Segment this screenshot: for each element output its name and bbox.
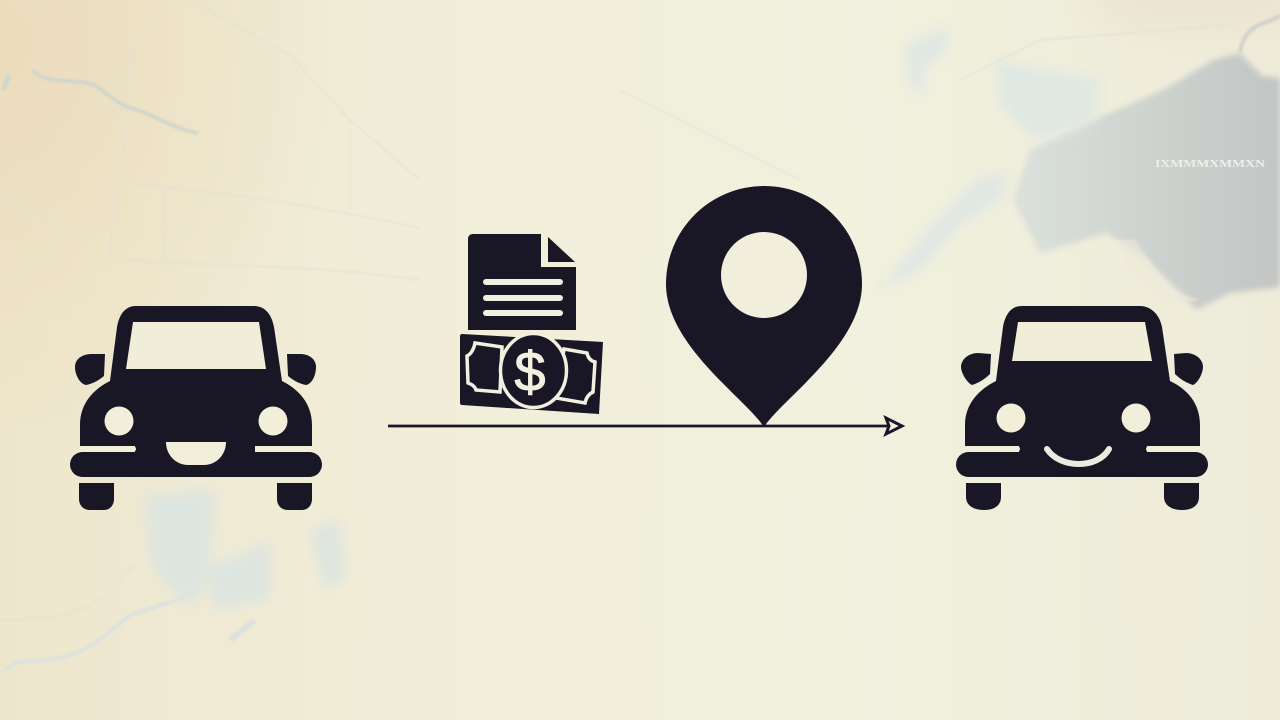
mirror right: [287, 354, 316, 385]
icon: car with open smile (left): [70, 306, 322, 510]
bumper gap left: [963, 446, 1020, 452]
windshield: [126, 322, 266, 369]
mirror right: [1174, 353, 1203, 385]
map label: IXMMMXMMXN: [1155, 158, 1265, 170]
icon: document with bill: [460, 234, 603, 414]
car body: [80, 306, 312, 446]
coin: [500, 334, 566, 408]
smile: [1047, 449, 1109, 464]
icon: location pin: [666, 186, 862, 427]
bumper gap right: [255, 446, 315, 452]
mirror left: [75, 354, 105, 385]
document fold: [548, 237, 575, 262]
mirror left: [961, 353, 991, 385]
banknote left frame: [467, 343, 502, 392]
document lines: [483, 279, 563, 316]
wheel left: [966, 483, 1001, 510]
bumper: [70, 452, 322, 477]
wheel left: [79, 483, 114, 510]
bumper gap left: [78, 446, 136, 452]
document: [468, 234, 576, 330]
map: lake and waterways: [870, 15, 1280, 310]
car body: [965, 306, 1200, 446]
bumper gap right: [1146, 446, 1203, 452]
icon: car with smile (right): [956, 306, 1208, 510]
bumper: [956, 452, 1208, 477]
arrow: [388, 418, 902, 434]
windshield: [1012, 322, 1152, 361]
wheel right: [277, 483, 312, 510]
headlight left: [996, 404, 1026, 432]
banknote right frame: [556, 349, 595, 403]
banknote: [460, 334, 603, 414]
open smile: [166, 442, 226, 465]
headlight right: [258, 406, 288, 436]
headlight left: [104, 406, 134, 436]
pin hole: [721, 232, 807, 318]
dollar sign: $: [514, 340, 546, 403]
headlight right: [1122, 404, 1150, 432]
wheel right: [1164, 483, 1199, 510]
